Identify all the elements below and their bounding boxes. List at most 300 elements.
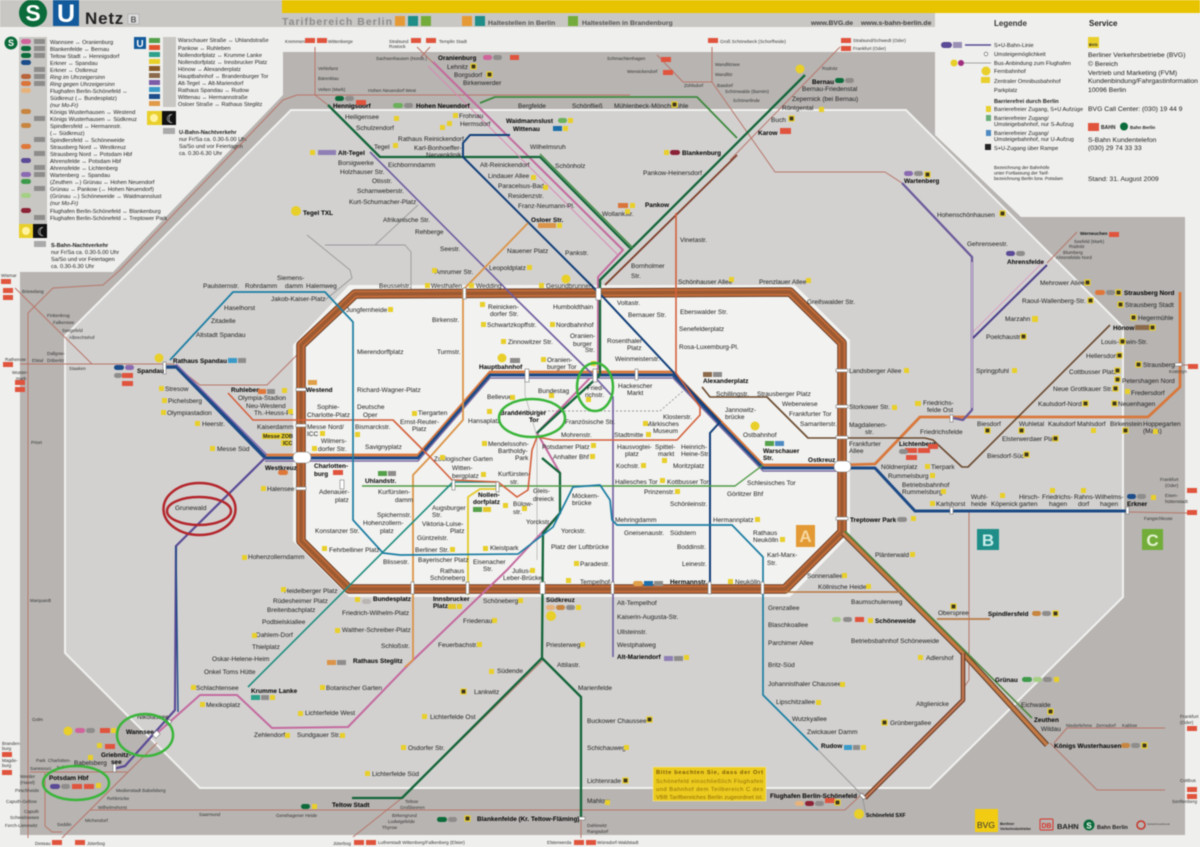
- station labels: west: Uhlandstr.: [365, 478, 396, 485]
- station labels: east: Hönow: [1113, 325, 1134, 332]
- station labels: east: Schöneweide: [875, 618, 916, 625]
- station labels: north: Karow: [758, 130, 778, 137]
- station labels: north: Afrikanische Str.: [383, 217, 430, 224]
- station labels: north: Waidmannslust: [506, 118, 554, 125]
- heading: Tarifbereich and zone key: www.s-bahn-berlin.de: [860, 20, 932, 27]
- station labels: east: Hirsch-: [1019, 494, 1040, 501]
- panel: S-Bahn line legend: Teltow Stadt ↔ Hennigsdorf: [50, 54, 120, 60]
- panel: service contacts: Service: [1089, 19, 1118, 28]
- station labels: city centre: Prinzenstr.: [644, 489, 675, 496]
- station labels: north: Borgsdorf: [454, 72, 482, 79]
- station labels: city centre: brücke: [572, 500, 592, 507]
- station labels: north: Rehberge: [415, 229, 444, 236]
- station labels: outer regional stops: Ahrensfelde Nord: [1056, 255, 1092, 260]
- station labels: west: Westkreuz: [265, 465, 297, 472]
- station labels: north: Seestr.: [440, 246, 460, 253]
- station labels: north: Osloer Str.: [531, 217, 564, 224]
- station labels: outer regional stops: Golm: [32, 717, 43, 722]
- station labels: city centre: Voltastr.: [617, 300, 640, 307]
- station labels: south: Nikolassee: [137, 714, 169, 721]
- panel: U-Bahn line legend: Rathaus Spandau ↔ Rudow: [178, 88, 250, 94]
- station labels: east: heide: [971, 501, 987, 508]
- station labels: outer regional stops: Rüdnitz: [1069, 244, 1085, 249]
- station labels: city centre: [400, 300, 837, 586]
- zone letter tiles: A: [799, 527, 812, 546]
- station labels: outer regional stops: Hohen Neuendorf West: [368, 88, 417, 93]
- station labels: city centre: Hausvogtei-: [617, 444, 652, 451]
- panel: S-Bahn line legend: Wartenberg ↔ Spandau: [50, 173, 110, 179]
- station labels: north: Prenzlauer Allee: [759, 279, 807, 286]
- station labels: east: Wutzkyallee: [792, 716, 827, 723]
- station labels: north: Tegel: [374, 144, 390, 151]
- station labels: outer regional stops: Rüdnitz: [822, 66, 838, 71]
- station labels: south: Dahlem-Dorf: [256, 632, 293, 639]
- station labels: south: see: [111, 759, 122, 766]
- station labels: north: Röntgental: [782, 105, 814, 112]
- panel: S-Bahn line legend: [4, 36, 167, 270]
- zone letter tiles: C: [1146, 531, 1159, 550]
- station labels: east: Hegermühle: [1138, 315, 1174, 322]
- station labels: city centre: Südstern: [670, 530, 696, 537]
- station labels: north: Beusselstr.: [379, 283, 411, 290]
- station labels: city centre: Humboldthain: [553, 304, 593, 311]
- station labels: outer regional stops: Groß Schönebeck (Schorfheide): [720, 39, 786, 44]
- station labels: north: Frohnau: [459, 113, 484, 120]
- station labels: north: Karl-Bonhoeffer-: [414, 145, 462, 152]
- station labels: outer regional stops: Michendorf: [85, 818, 108, 823]
- station labels: outer regional stops: Sanssouci: [30, 766, 51, 771]
- station labels: east: felde Ost: [927, 407, 953, 414]
- station labels: north: Eichbornndamm: [388, 162, 435, 169]
- station labels: east: hagen: [1049, 501, 1067, 508]
- panel: S-Bahn line legend: Ring gegen Uhrzeigersinn: [50, 82, 115, 88]
- logos: BVG, DB, S-Bahn, VBB: DB: [1041, 823, 1052, 830]
- station labels: city centre: Kottbusser Tor: [667, 479, 710, 486]
- panel: U-Bahn line legend: U-Bahn-Nachtverkehr: [179, 130, 237, 136]
- station labels: outer regional stops: Rostock: [389, 44, 406, 49]
- station labels: east: Tierpark: [931, 464, 955, 471]
- logo: S-Bahn and U-Bahn Netz title: B: [131, 16, 137, 24]
- panel: U-Bahn line legend: Alt-Tegel ↔ Alt-Mariendorf: [178, 81, 244, 87]
- station labels: north: Pankow: [645, 202, 669, 209]
- line: S8 and S85 north branches: [428, 66, 737, 285]
- station labels: city centre: Senefelderplatz: [679, 326, 724, 333]
- station labels: east: Flughafen Berlin-Schönefeld: [770, 793, 857, 800]
- panel: S-Bahn line legend: Flughafen Berlin-Schönefeld ↔ Blankenburg: [50, 209, 161, 215]
- station labels: west: Olympiastadion: [167, 410, 212, 417]
- station labels: city centre: Hansaplatz: [468, 418, 501, 425]
- station labels: city centre: Schillingstr.: [716, 391, 749, 398]
- station labels: city centre: Zoologischer Garten: [434, 456, 493, 463]
- station labels: outer regional stops: Wandlitzsee: [715, 62, 740, 67]
- station labels: city centre: burger: [573, 341, 593, 348]
- line: Stadtbahn east-west band: [165, 292, 1180, 511]
- station labels: city centre: Mehringdamm: [615, 517, 657, 524]
- panel: map legend: Fernbahnhof: [994, 69, 1026, 75]
- station labels: north: Wartenberg: [904, 178, 939, 185]
- station labels: west: Adenauer-: [319, 489, 349, 496]
- station labels: east: Rummelsburg: [888, 473, 929, 480]
- trade fair labels: Messe ZOB ICC: [263, 434, 293, 447]
- station labels: outer regional stops: Werneuchen: [1080, 231, 1108, 236]
- station labels: south: Botanischer Garten: [326, 685, 382, 692]
- panel: S-Bahn line legend: ca. 0.30-6.30 Uhr: [51, 264, 94, 270]
- line: U-Bahn U3 teal: [248, 482, 496, 687]
- station labels: east: Grünbergallee: [890, 720, 932, 727]
- station labels: city centre: Eisenacher: [473, 559, 506, 566]
- callout: Schönefeld tariff notice: Schönefeld einschließlich Flughafen: [656, 779, 763, 785]
- station labels: north: Schulzendorf: [356, 125, 394, 132]
- station labels: outer regional stops: Medienstadt Babelsberg: [116, 788, 166, 793]
- station labels: east: Magdalenen-: [849, 422, 887, 429]
- station labels: outer regional stops: Priort: [31, 440, 43, 445]
- station labels: west: Deutsche: [357, 404, 385, 411]
- station labels: east: Hohenschönhausen: [937, 212, 995, 219]
- station labels: outer regional stops: Seefeld (Mark): [1074, 239, 1105, 244]
- panel: S-Bahn line legend: S: [8, 38, 14, 48]
- station labels: east: (Mark): [1143, 428, 1162, 435]
- station labels: west: Haselhorst: [224, 305, 255, 312]
- station labels: south: Friedenau: [463, 618, 493, 625]
- station labels: south: Griebnitz-: [101, 752, 131, 759]
- station labels: outer regional stops: Pirschheide: [15, 788, 39, 793]
- station labels: city centre: Bartholdy-: [498, 448, 528, 455]
- station labels: north: Bornholmer: [631, 263, 665, 270]
- station labels: outer regional stops: Wuster-: [12, 370, 28, 375]
- station labels: city centre: Str.: [763, 455, 774, 462]
- panel: S-Bahn line legend: Sa/So und vor Feiertagen: [51, 257, 115, 263]
- station labels: east: Betriebsbahnhof: [902, 482, 950, 489]
- station labels: outer regional stops: Staaken: [69, 366, 86, 371]
- station labels: north: Vinetastr.: [680, 237, 707, 244]
- station labels: east: Rudow: [821, 743, 842, 750]
- station labels: north: Rathaus Reinickendorf: [398, 136, 464, 143]
- station labels: outer regional stops: Cottbus: [1180, 778, 1197, 783]
- station labels: north: Alt-Reinickendorf: [480, 162, 530, 169]
- station labels: west: Grunewald: [175, 505, 207, 512]
- line: S-Bahn ring: [301, 292, 842, 589]
- heading: Tarifbereich and zone key: www.BVG.de: [810, 20, 853, 27]
- station labels: west: dorfer Str.: [318, 446, 347, 453]
- station labels: east: Cottbusser Platz: [1069, 369, 1117, 376]
- logo: S-Bahn and U-Bahn Netz title: S: [25, 0, 41, 26]
- station labels: city centre: Tiergarten: [418, 410, 448, 417]
- station labels: east: Wuhl-: [971, 494, 988, 501]
- station labels: south: Lichterfelde West: [305, 710, 355, 717]
- station labels: outer regional stops: Rangsdorf: [587, 829, 609, 834]
- station labels: south: Krumme Lanke: [251, 688, 298, 695]
- station labels: west: Jakob-Kaiser-Platz: [271, 296, 326, 303]
- panel: S-Bahn line legend: Strausberg Nord ↔ Potsdam Hbf: [50, 152, 133, 158]
- station labels: south: Podbielskiallee: [262, 619, 306, 626]
- station labels: city centre: Hermannplatz: [713, 517, 753, 524]
- station labels: north: Tegel TXL: [303, 210, 333, 217]
- station labels: west: platz: [335, 497, 349, 504]
- station labels: outer regional stops: Frankfurt: [1180, 714, 1199, 719]
- station labels: west: Mierendorffplatz: [357, 349, 404, 356]
- station labels: outer regional stops: Falkensee: [53, 320, 75, 325]
- station labels: outer regional stops: burg: [2, 746, 12, 751]
- station labels: west: Messe Nord/: [307, 424, 344, 431]
- heading: Tarifbereich and zone key: Tarifbereich Berlin: [282, 16, 393, 28]
- station labels: outer regional stops: Kostrzyn: [1169, 369, 1187, 374]
- station labels: city centre: Schwartzkopffstr.: [487, 322, 537, 329]
- station icons: long-distance stations: [64, 64, 864, 819]
- station labels: north: Franz-Neumann-Pl.: [518, 203, 575, 210]
- panel: U-Bahn line legend: Nollendorfplatz ↔ Innsbrucker Platz: [178, 60, 267, 66]
- station labels: south: Südkreuz: [546, 597, 575, 604]
- station labels: west: Westend: [306, 387, 333, 394]
- station labels: city centre: Gneisenaustr.: [624, 530, 664, 537]
- station labels: outer regional stops: Schönwalde (Barnim): [725, 89, 769, 94]
- station labels: city centre: Zinnowitzer Str.: [508, 339, 553, 346]
- station labels: city centre: dorfplatz: [473, 499, 500, 506]
- panel: service contacts: BVG: [1089, 42, 1098, 47]
- station labels: east: Friedrichs-: [923, 400, 954, 407]
- station labels: city centre: Platz: [627, 345, 641, 352]
- station labels: outer regional stops: Seegefeld: [62, 328, 83, 333]
- station labels: city centre: Boddinstr.: [677, 544, 706, 551]
- station labels: outer regional stops: Albrechtshof: [69, 335, 95, 340]
- station labels: north: Hermsdorf: [460, 121, 491, 128]
- panel: U-Bahn line legend: Hönow ↔ Alexanderplatz: [178, 67, 241, 73]
- panel: map legend: bezeichnung Berlin bzw. Potsdam: [994, 176, 1063, 181]
- station labels: east: Johannisthaler Chaussee: [768, 681, 842, 688]
- station labels: city centre: Möckern-: [572, 493, 599, 500]
- panel: U-Bahn line legend: Sa/So und vor Feiertagen: [179, 144, 243, 150]
- station labels: outer regional stops: Großbeeren: [400, 805, 425, 810]
- station labels: city centre: Augsburger: [432, 505, 466, 512]
- station labels: west: Spandau: [137, 368, 164, 375]
- station labels: outer regional stops: Rehbrücke: [107, 796, 130, 801]
- panel: U-Bahn line legend: Warschauer Straße ↔ Uhlandstraße: [178, 38, 269, 44]
- panel: service contacts: Kundenbindung/Fahrgastinformation: [1088, 78, 1198, 85]
- station labels: east: Rahns-: [1074, 494, 1095, 501]
- station labels: outer regional stops: Senftenberg: [1172, 799, 1197, 804]
- station labels: south: Südende: [497, 668, 523, 675]
- line: U-Bahn U4 yellow: [468, 489, 496, 595]
- station labels: west: Rohrdamm: [245, 283, 277, 290]
- station labels: north: Buch: [771, 117, 786, 124]
- station labels: outer regional stops: burg: [2, 763, 12, 768]
- trade fair labels: Messe ZOB ICC: ICC: [283, 441, 292, 447]
- station labels: east: Petershagen Nord: [1122, 378, 1175, 385]
- station labels: city centre: Oranien-: [547, 357, 572, 364]
- station labels: outer regional stops: Velten (Mark): [318, 87, 346, 92]
- station labels: outer regional stops: Dessau: [35, 841, 51, 846]
- station labels: city centre: Julius-: [512, 568, 531, 575]
- station labels: east: Grenzallee: [768, 605, 800, 612]
- line: S1 pink: [155, 62, 623, 735]
- station labels: city centre: Reinicken-: [488, 304, 519, 311]
- station labels: city centre: Yorckstr.: [561, 528, 586, 535]
- station labels: east: Zwickauer Damm: [807, 729, 858, 736]
- panel: S-Bahn line legend: Flughafen Berlin-Schönefeld ↔ Treptower Park: [50, 216, 167, 222]
- station labels: city centre: Alexanderplatz: [703, 378, 748, 385]
- panel: map legend: Barrierefrei durch Berlin: [994, 99, 1059, 105]
- line: U-Bahn U6 purple: [370, 152, 613, 657]
- station labels: city centre: Märkisches: [646, 421, 680, 428]
- station labels: west: Bismarckstr.: [355, 424, 391, 431]
- station labels: east: Altglienicke: [916, 701, 949, 708]
- line: U-Bahn U2 red: [228, 213, 700, 497]
- station labels: city centre: Rosenthaler: [607, 338, 643, 345]
- station labels: city centre: Gleis-: [533, 488, 550, 495]
- station labels: north: Hohen Neuendorf: [416, 103, 470, 110]
- station labels: east: Strausberg: [1143, 362, 1175, 369]
- panel: map legend: S+U-Bahn-Linie: [994, 43, 1034, 49]
- ramp access icons: [461, 64, 1155, 821]
- panel: map legend: Barrierefreier Zugang, S+U Aufzüge: [994, 107, 1083, 113]
- station labels: west: Halemweg: [306, 283, 337, 290]
- panel: S-Bahn line legend: (↔ Südkreuz): [50, 131, 85, 137]
- station labels: city centre: Brandenburger: [500, 410, 547, 417]
- station labels: city centre: Rathaus: [440, 568, 465, 575]
- station labels: outer regional stops: Saarmund: [199, 812, 221, 817]
- station labels: city centre: Heinrich-: [681, 444, 707, 451]
- station labels: east: Friedrichsfelde: [920, 429, 963, 436]
- station labels: south: Wannsee: [126, 729, 154, 736]
- panel: service contacts: BAHN: [1101, 125, 1116, 131]
- station labels: outer regional stops: hüttenstadt: [1165, 499, 1188, 504]
- station labels: east: Friedrichs-: [1042, 494, 1073, 501]
- station labels: city centre: Weberwiese: [782, 401, 818, 408]
- panel: map legend: S+U-Zugang über Rampe: [994, 146, 1058, 152]
- station labels: outer regional stops: Charlotten-: [48, 758, 71, 763]
- station labels: south: Feuerbachstr.: [438, 642, 478, 649]
- station labels: south: Oskar-Helene-Heim: [212, 656, 269, 663]
- station labels: city centre: Bayerischer Platz: [418, 557, 469, 564]
- station labels: south: Mahlow: [587, 798, 610, 805]
- station labels: city centre: Mohrenstr.: [561, 432, 592, 439]
- station labels: outer regional stops: Wünsdorf-Waldstadt: [597, 840, 639, 845]
- station labels: south: Blankenfelde (Kr. Teltow-Fläming): [477, 816, 580, 823]
- station labels: city centre: Hallesches Tor: [615, 479, 658, 486]
- station labels: city centre: Heine-Str.: [681, 451, 710, 458]
- station labels: north: Bernau-Friedenstal: [802, 86, 858, 93]
- station labels: north: Lindauer Allee: [488, 173, 530, 180]
- station labels: city centre: Neukölln: [735, 579, 761, 586]
- station labels: east: Köpenick: [991, 501, 1018, 508]
- station labels: east: Spindlersfeld: [988, 611, 1029, 618]
- station labels: south: Schloßstr.: [381, 643, 410, 650]
- station labels: east: Kaulsdorf: [1048, 421, 1076, 428]
- station labels: east: Königs Wusterhausen: [1054, 743, 1121, 750]
- line: Wannsee via Grunewald (S7): [113, 458, 265, 769]
- station labels: north: Schönholz: [555, 163, 585, 170]
- station labels: city centre: richstr.: [585, 392, 604, 399]
- station labels: outer regional stops: Wandlitz: [715, 72, 733, 77]
- panel: U-Bahn line legend: ☾: [166, 112, 177, 126]
- station labels: city centre: Moritzplatz: [673, 463, 704, 470]
- logos: BVG, DB, S-Bahn, VBB: Bahn Berlin: [1097, 825, 1129, 831]
- station labels: city centre: dreieck: [533, 496, 555, 503]
- station labels: outer regional stops: (Havel): [20, 780, 35, 785]
- station labels: outer regional stops: Dahlewitz: [587, 823, 608, 828]
- station labels: outer regional stops: Elstal: [32, 358, 43, 363]
- station labels: outer regional stops: Marquardt: [30, 598, 52, 603]
- station labels: east: Neuenhagen: [1118, 401, 1156, 408]
- panel: U-Bahn line legend: Wittenau ↔ Hermannstraße: [178, 95, 248, 101]
- station labels: city centre: bergplatz: [452, 473, 479, 480]
- logos: BVG, DB, S-Bahn, VBB: Berliner: [1000, 822, 1015, 826]
- station labels: outer regional stops: Döberitz: [47, 358, 65, 363]
- station labels: east: Grünau: [995, 677, 1018, 684]
- station labels: east: Oberspree: [938, 610, 969, 617]
- station labels: city centre: burger Tor: [547, 364, 577, 371]
- station labels: outer regional stops: Jüterbog: [87, 841, 105, 846]
- station labels: outer regional stops: Wismar: [1, 273, 17, 278]
- station labels: east: Zeuthen: [1034, 717, 1059, 724]
- station labels: outer regional stops: Ferch-Lienewitz: [5, 823, 38, 828]
- station labels: west: Jungfernheide: [346, 307, 388, 314]
- station labels: city centre: Schönleinstr.: [670, 501, 707, 508]
- station labels: outer regional stops: Caputh: [24, 809, 39, 814]
- station labels: east: Springpfuhl: [976, 368, 1009, 375]
- line: U-Bahn U8 blue: [463, 135, 720, 590]
- station labels: outer regional stops: Park: [36, 758, 46, 763]
- header band: [0, 0, 1200, 27]
- station labels: north: Wilhelmsruh: [530, 144, 566, 151]
- station labels: east: Ahrensfelde: [1007, 259, 1044, 266]
- station labels: city centre: Str.: [483, 566, 493, 573]
- station labels: east: Eichwalde: [1021, 702, 1051, 709]
- bus connections (thin grey): [307, 205, 690, 560]
- callout: Schönefeld tariff notice: Bitte beachten Sie, dass der Ort: [656, 770, 763, 776]
- station labels: outer regional stops: Kremmen: [285, 39, 305, 44]
- panel: map legend: Bus-Anbindung zum Flughafen: [994, 61, 1071, 67]
- station labels: east: str.: [865, 429, 874, 436]
- station labels: west: Blissestr.: [383, 559, 409, 566]
- station labels: north: Otisstr.: [372, 178, 392, 185]
- station labels: outer regional stops: Templin Stadt: [439, 39, 468, 44]
- station labels: outer regional stops: Schmachtenhagen: [607, 56, 646, 61]
- station labels: west: Fehrbelliner Platz: [329, 547, 380, 554]
- panel: U-Bahn line legend: Hauptbahnhof ↔ Brandenburger Tor: [178, 74, 269, 80]
- station labels: city centre: Schlesisches Tor: [747, 480, 796, 487]
- station labels: outer regional stops: Branden-: [2, 741, 21, 746]
- station labels: north: Bergfelde: [518, 103, 546, 110]
- station labels: east: Hellersdorf: [1086, 353, 1118, 360]
- panel: service contacts: (030) 29 74 33 33: [1088, 145, 1142, 152]
- station labels: south: Bundesplatz: [373, 596, 411, 603]
- station labels: east: Allee: [849, 448, 864, 455]
- station labels: north: Bernau: [812, 79, 834, 86]
- panel: S-Bahn line legend: (nur Mo-Fr): [50, 201, 78, 207]
- station labels: south: Westphalweg: [617, 642, 656, 649]
- station labels: city centre: Hermannstr.: [670, 579, 708, 586]
- station labels: west: Kurfürsten-: [378, 489, 410, 496]
- station labels: east: Marzahn: [1005, 316, 1031, 323]
- station labels: city centre: Turmstr.: [437, 349, 461, 356]
- station labels: north: Alt-Tegel: [338, 150, 365, 157]
- line: U-Bahn U7 light blue: [170, 292, 818, 750]
- station labels: city centre: Tempelhof: [580, 579, 610, 586]
- station labels: city centre: Warschauer: [763, 448, 800, 455]
- station labels: east: Ostkreuz: [808, 457, 835, 464]
- logos: BVG, DB, S-Bahn, VBB: Verkehrsverbund: [1147, 822, 1170, 826]
- station labels: east: Fredersdorf: [1131, 390, 1165, 397]
- station labels: city centre: Stadtmitte: [614, 432, 644, 439]
- station labels: west: Charlotten-: [314, 463, 348, 470]
- station labels: south: Priesterweg: [546, 642, 581, 649]
- station labels: south: Potsdam Hbf: [49, 775, 89, 782]
- station labels: north: Scharnweberstr.: [357, 188, 404, 195]
- station labels: south: Rathaus Steglitz: [353, 658, 403, 665]
- station labels: north: Mühlenbeck-Mönchmühle: [614, 103, 689, 110]
- panel: service contacts: © Bereich: [1088, 60, 1118, 68]
- station labels: city centre: Paradestr.: [580, 561, 610, 568]
